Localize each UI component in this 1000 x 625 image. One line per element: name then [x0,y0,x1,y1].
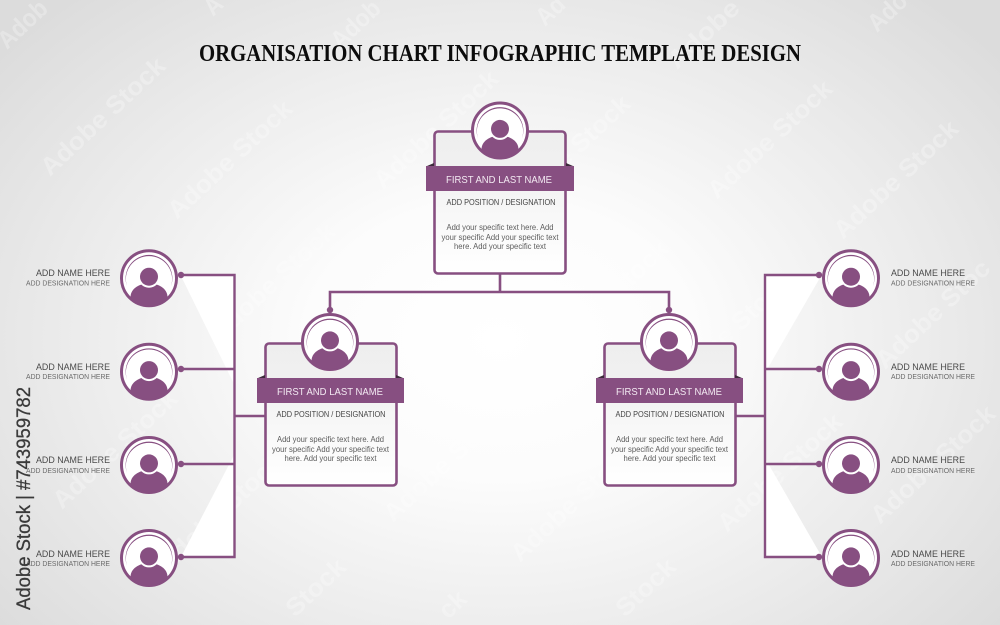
right team member 2: ADD NAME HERE [891,362,965,373]
stock watermark pattern: Adobe Stock [368,65,504,194]
stock watermark pattern: Adobe Stock [538,235,674,364]
banner: left manager name [257,378,404,403]
text: right manager description: here. Add your specific text [624,454,716,463]
text: left manager description [272,435,390,463]
stock watermark pattern: Adobe Stock [828,115,964,244]
text: right manager position: ADD POSITION / DESIGNATION [616,409,724,419]
right team member 3: ADD NAME HERE [891,455,965,466]
stock watermark pattern: Adobe Stock [702,75,838,204]
left team member 1 [26,251,176,308]
panel: right manager card [596,314,743,486]
banner: left manager name: FIRST AND LAST NAME [277,386,383,398]
left team member 3 [26,438,176,495]
text: top card description: here. Add your specific text [454,242,547,251]
icon: right manager avatar [642,314,696,372]
text: top card description: your specific Add your specific text [442,233,559,242]
connector: top card to managers [327,273,672,313]
text: left manager description: Add your specific text here. Add [277,435,384,444]
left team member 2: ADD DESIGNATION HERE [26,374,110,381]
stock id vertical caption: Adobe Stock | #743959782 [14,387,35,610]
icon: left manager avatar [302,314,358,372]
left team member 4 [26,530,176,588]
right team member 3: ADD DESIGNATION HERE [891,468,975,475]
text: right manager description: your specific Add your specific text [611,445,729,454]
stock watermark pattern: ck [433,585,473,624]
banner: right manager name: FIRST AND LAST NAME [616,386,722,398]
banner: top card name: FIRST AND LAST NAME [446,174,552,186]
stock watermark pattern: Adobe Stock [205,218,341,347]
right team member 1 [824,251,975,308]
stock watermark pattern: Adobe Stock [661,268,797,397]
left team member 2 [26,344,176,402]
stock watermark pattern: Adobe Stock [152,448,288,577]
stock watermark pattern: Stock [280,553,352,622]
left team member 4: ADD NAME HERE [36,549,110,560]
left team member 1: ADD NAME HERE [36,268,110,279]
left team member 2: ADD NAME HERE [36,362,110,373]
stock watermark pattern: Adobe Stock [505,438,641,567]
text: left manager position: ADD POSITION / DESIGNATION [276,409,386,419]
stock watermark pattern: Adobe Stoc [870,254,996,374]
connector: left team tree [178,272,265,560]
stock watermark pattern: Adobe Stock [712,408,848,537]
left team member 1: ADD DESIGNATION HERE [26,280,110,288]
stock watermark pattern: Adobe Stock [35,52,171,181]
right team member 4: ADD DESIGNATION HERE [891,561,975,568]
light rays behind the connector lines [181,276,822,557]
right team member 1: ADD DESIGNATION HERE [891,280,975,288]
stock watermark pattern: Adobe Stock [162,95,298,224]
right team member 2: ADD DESIGNATION HERE [891,374,975,381]
stock watermark pattern: Stock [610,553,682,622]
icon: top card avatar [472,103,528,160]
text: left manager description: here. Add your specific text [284,454,377,463]
left team member 4: ADD DESIGNATION HERE [26,561,110,568]
stock watermark pattern: Adobe [662,0,746,74]
panel: left manager card [257,314,404,486]
stock watermark pattern: Adobe Stock [500,90,636,219]
banner: top card name [426,166,574,191]
stock watermark pattern: Adobe Stock [865,400,1000,529]
text: right manager description [611,435,729,463]
text: top card description [442,223,559,251]
text: right manager description: Add your specific text here. Add [616,435,723,444]
stock watermark pattern: Adobe Stock [47,385,183,514]
stock watermark pattern: Adobe Stock [378,398,514,527]
panel: top card [426,103,574,274]
right team member 3 [824,438,975,495]
left team member 3: ADD NAME HERE [36,455,110,466]
text: left manager description: your specific Add your specific text [272,445,390,454]
connector: right team tree [735,272,822,560]
banner: right manager name [596,378,743,403]
text: top card position: ADD POSITION / DESIGNATION [446,197,556,207]
right team member 2 [824,344,975,402]
title: ORGANISATION CHART INFOGRAPHIC TEMPLATE DESIGN [199,41,802,67]
text: top card description: Add your specific text here. Add [446,223,554,232]
left team member 3: ADD DESIGNATION HERE [26,468,110,475]
right team member 4: ADD NAME HERE [891,549,965,560]
right team member 1: ADD NAME HERE [891,268,965,279]
right team member 4 [824,530,975,588]
